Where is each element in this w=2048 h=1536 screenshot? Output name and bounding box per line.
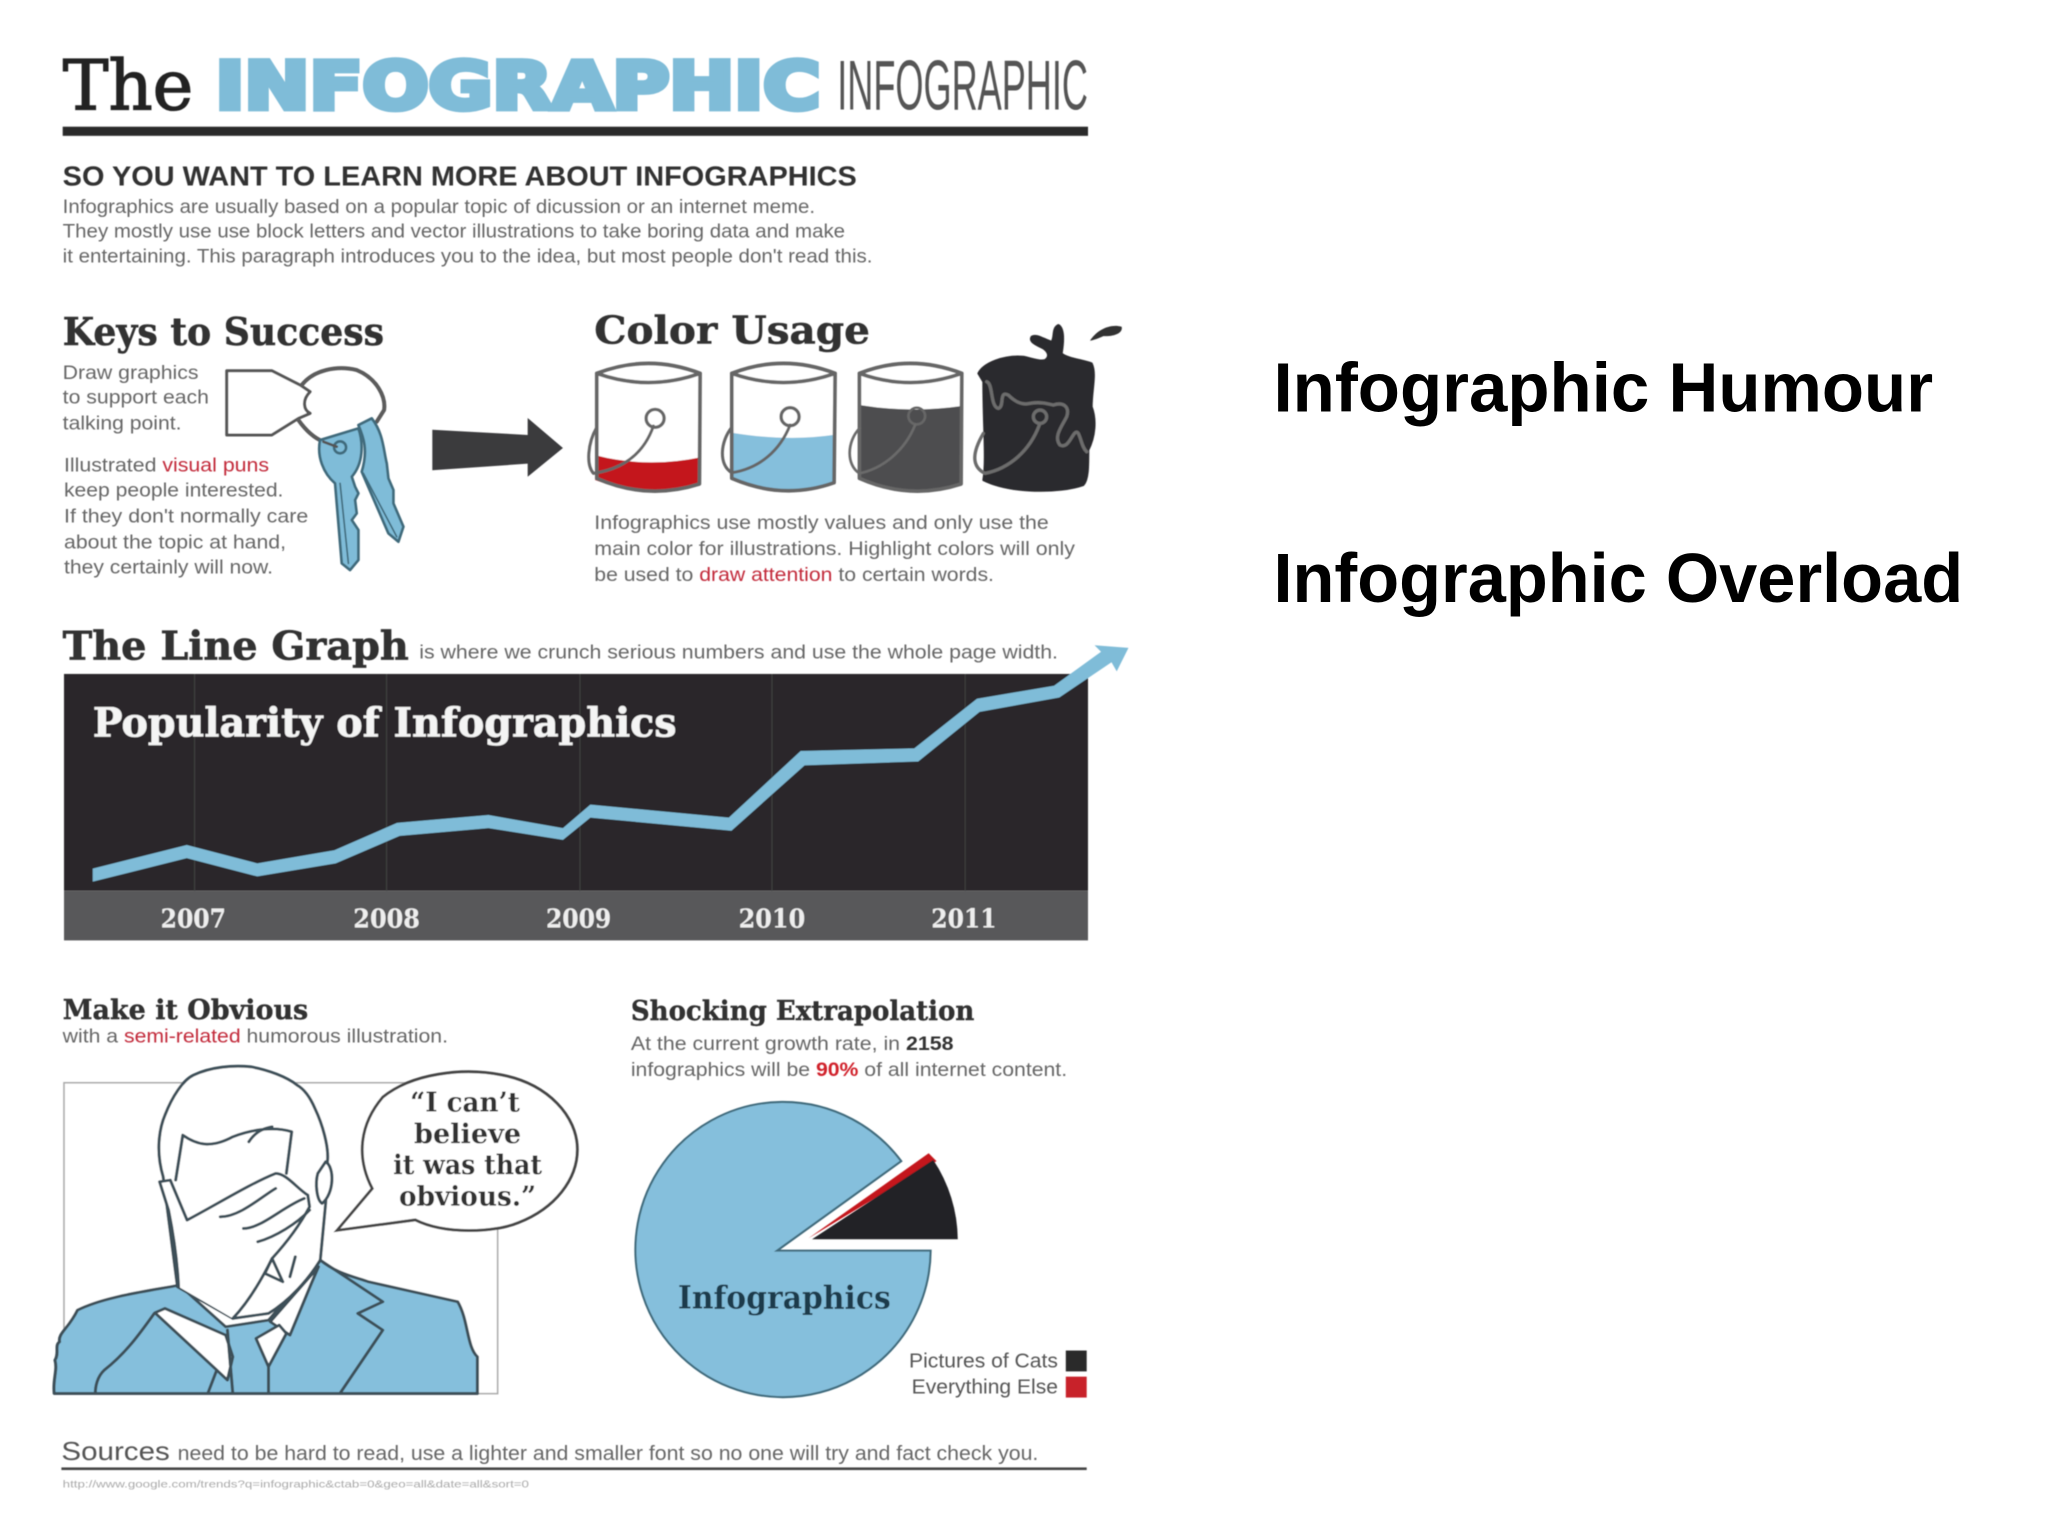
sources footer: need to be hard to read, use a lighter and smaller font so no one will try and fact check you.	[178, 1443, 1038, 1465]
year labels: 2010	[739, 903, 805, 934]
text block: visual puns: they certainly will now.	[64, 556, 273, 578]
arrow: keys to colour	[432, 418, 563, 477]
sources footer: Sources	[61, 1436, 170, 1466]
heading: infographic overload: Infographic Overload	[1273, 539, 1963, 617]
callout: speech bubble: believe	[414, 1118, 521, 1150]
subheading: with a semi-related humorous illustration.	[62, 1025, 448, 1047]
text block: color usage: Infographics use mostly values and only use the	[594, 512, 1049, 534]
text block: extrapolation	[631, 1033, 1067, 1081]
panel: make it obvious	[54, 994, 577, 1394]
panel: keys to success	[63, 309, 403, 578]
icon: bucket overflowing black	[975, 325, 1122, 491]
text block: visual puns: If they don't normally care	[64, 505, 308, 527]
text block: draw graphics: Draw graphics	[63, 362, 199, 384]
title: The	[63, 47, 193, 127]
pie chart	[635, 1102, 958, 1397]
intro text block: it entertaining. This paragraph introduces you to the idea, but most people don't read this.	[63, 246, 872, 268]
icon: bucket grey	[850, 363, 962, 492]
callout: speech bubble: “I can’t	[410, 1087, 520, 1119]
text block: visual puns	[64, 455, 308, 578]
text block: color usage: main color for illustrations. Highlight colors will only	[594, 538, 1075, 560]
legend	[909, 1351, 1087, 1399]
heading: the line graph: The Line Graph	[63, 624, 409, 670]
heading: keys to success: Keys to Success	[63, 309, 384, 354]
pie chart: Infographics	[678, 1281, 891, 1317]
title: INFOGRAPHIC	[216, 48, 820, 124]
legend: Everything Else	[912, 1377, 1058, 1399]
intro text block	[63, 160, 872, 268]
icon: keys on a ring	[227, 368, 403, 570]
title	[63, 46, 1088, 127]
text block: draw graphics	[63, 362, 209, 435]
text block: draw graphics: talking point.	[63, 413, 182, 435]
sources footer: http://www.google.com/trends?q=infographic&ctab=0&geo=all&date=all&sort=0	[63, 1480, 529, 1491]
heading: make it obvious: Make it Obvious	[63, 994, 308, 1026]
text block: draw graphics: to support each	[63, 387, 209, 409]
heading: color usage: Color Usage	[594, 308, 870, 353]
icon: bucket red	[589, 363, 700, 491]
text block: color usage: be used to draw attention to certain words.	[594, 564, 994, 586]
panel: shocking extrapolation	[631, 995, 1087, 1399]
heading: shocking extrapolation: Shocking Extrapolation	[631, 995, 974, 1027]
year labels	[161, 903, 997, 934]
illustration: facepalm man	[54, 1066, 477, 1393]
panel: color usage	[589, 308, 1122, 586]
year labels: 2007	[161, 903, 226, 934]
chart title: Popularity of Infographics	[93, 699, 677, 747]
callout: speech bubble: obvious.”	[399, 1181, 536, 1213]
callout: speech bubble	[337, 1072, 577, 1231]
heading: the line graph	[63, 624, 1058, 670]
title rule	[63, 127, 1088, 136]
intro text block: Infographics are usually based on a popular topic of dicussion or an internet meme.	[63, 196, 815, 218]
year labels: 2011	[931, 903, 997, 934]
intro text block: They mostly use use block letters and vector illustrations to take boring data and make	[63, 221, 845, 243]
sources footer	[61, 1436, 1087, 1491]
text block: visual puns: keep people interested.	[64, 479, 283, 501]
line chart panel	[64, 645, 1128, 940]
heading: the line graph: is where we crunch serious numbers and use the whole page width.	[419, 641, 1058, 663]
text block: extrapolation: At the current growth rate, in 2158	[631, 1033, 954, 1055]
intro text block: SO YOU WANT TO LEARN MORE ABOUT INFOGRAPHICS	[63, 160, 857, 191]
icon: bucket blue	[722, 363, 835, 491]
rising trend line with arrow	[93, 645, 1128, 882]
text block: visual puns: about the topic at hand,	[64, 532, 286, 554]
icons: paint buckets	[589, 363, 962, 492]
text block: extrapolation: infographics will be 90% of all internet content.	[631, 1059, 1067, 1081]
title: INFOGRAPHIC	[837, 46, 1088, 125]
text block: color usage	[594, 512, 1075, 586]
heading: infographic humour: Infographic Humour	[1273, 348, 1933, 426]
illustration frame	[64, 1083, 498, 1394]
callout: speech bubble: it was that	[393, 1149, 542, 1181]
year labels: 2008	[353, 903, 420, 934]
legend: Pictures of Cats	[909, 1351, 1058, 1373]
text block: visual puns: Illustrated visual puns	[64, 455, 269, 477]
year labels: 2009	[546, 903, 611, 934]
